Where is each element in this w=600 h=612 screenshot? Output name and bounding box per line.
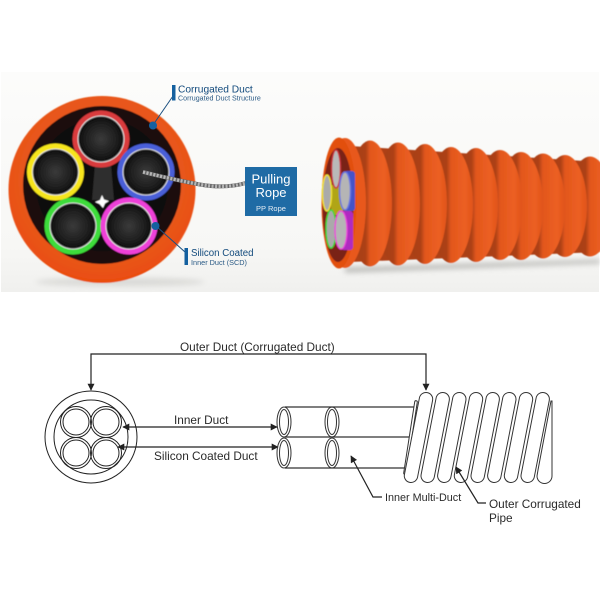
leader: outer corrugated pipe [456, 467, 486, 503]
diagram arrow: inner duct [123, 426, 277, 428]
diagram label: silicon coated duct: Silicon Coated Duct [154, 449, 258, 463]
callout: silicon coated inner duct: Silicon Coated [191, 248, 253, 259]
inner duct: green [44, 198, 102, 254]
small tubes [322, 150, 355, 250]
label box: pulling rope: Pulling [251, 172, 291, 186]
pulling rope [143, 172, 246, 186]
illustration: corrugated duct side view [322, 138, 600, 272]
illustration: corrugated duct end view [8, 96, 205, 286]
callout: silicon coated inner duct: Inner Duct (SCD) [191, 258, 247, 267]
diagram: pipe end lobe [537, 401, 552, 484]
diagram: cross section [45, 391, 137, 483]
diagram: outer duct arrow [91, 354, 426, 390]
inner duct: magenta [100, 198, 158, 254]
inner duct: yellow [27, 144, 84, 200]
inner duct: blue [118, 144, 174, 200]
opening rim [324, 138, 366, 268]
label: inner multi-duct: Inner Multi-Duct [385, 492, 461, 504]
diagram label: outer duct: Outer Duct (Corrugated Duct) [180, 340, 335, 354]
label: outer corrugated pipe: Pipe [489, 511, 513, 525]
callout: corrugated duct [149, 84, 261, 130]
diagram arrow: silicon coated duct [118, 446, 278, 448]
diagram: outer corrugated pipe [405, 399, 543, 476]
label box: pulling rope [245, 167, 297, 216]
label: outer corrugated pipe: Outer Corrugated [489, 497, 581, 511]
inner duct: red [72, 110, 130, 168]
callout: corrugated duct: Corrugated Duct Structure [178, 94, 261, 102]
callout: silicon coated inner duct [152, 222, 253, 267]
diagram label: inner duct: Inner Duct [174, 413, 229, 427]
outer orange duct wall [8, 96, 196, 283]
label box: pulling rope: PP Rope [256, 204, 286, 213]
centre highlight [95, 195, 109, 208]
callout: corrugated duct: Corrugated Duct [178, 84, 253, 96]
leader: inner multi-duct [351, 456, 382, 497]
photo band background [1, 72, 599, 292]
label box: pulling rope: Rope [255, 185, 287, 200]
diagram: inner multi-duct tubes [277, 407, 416, 468]
